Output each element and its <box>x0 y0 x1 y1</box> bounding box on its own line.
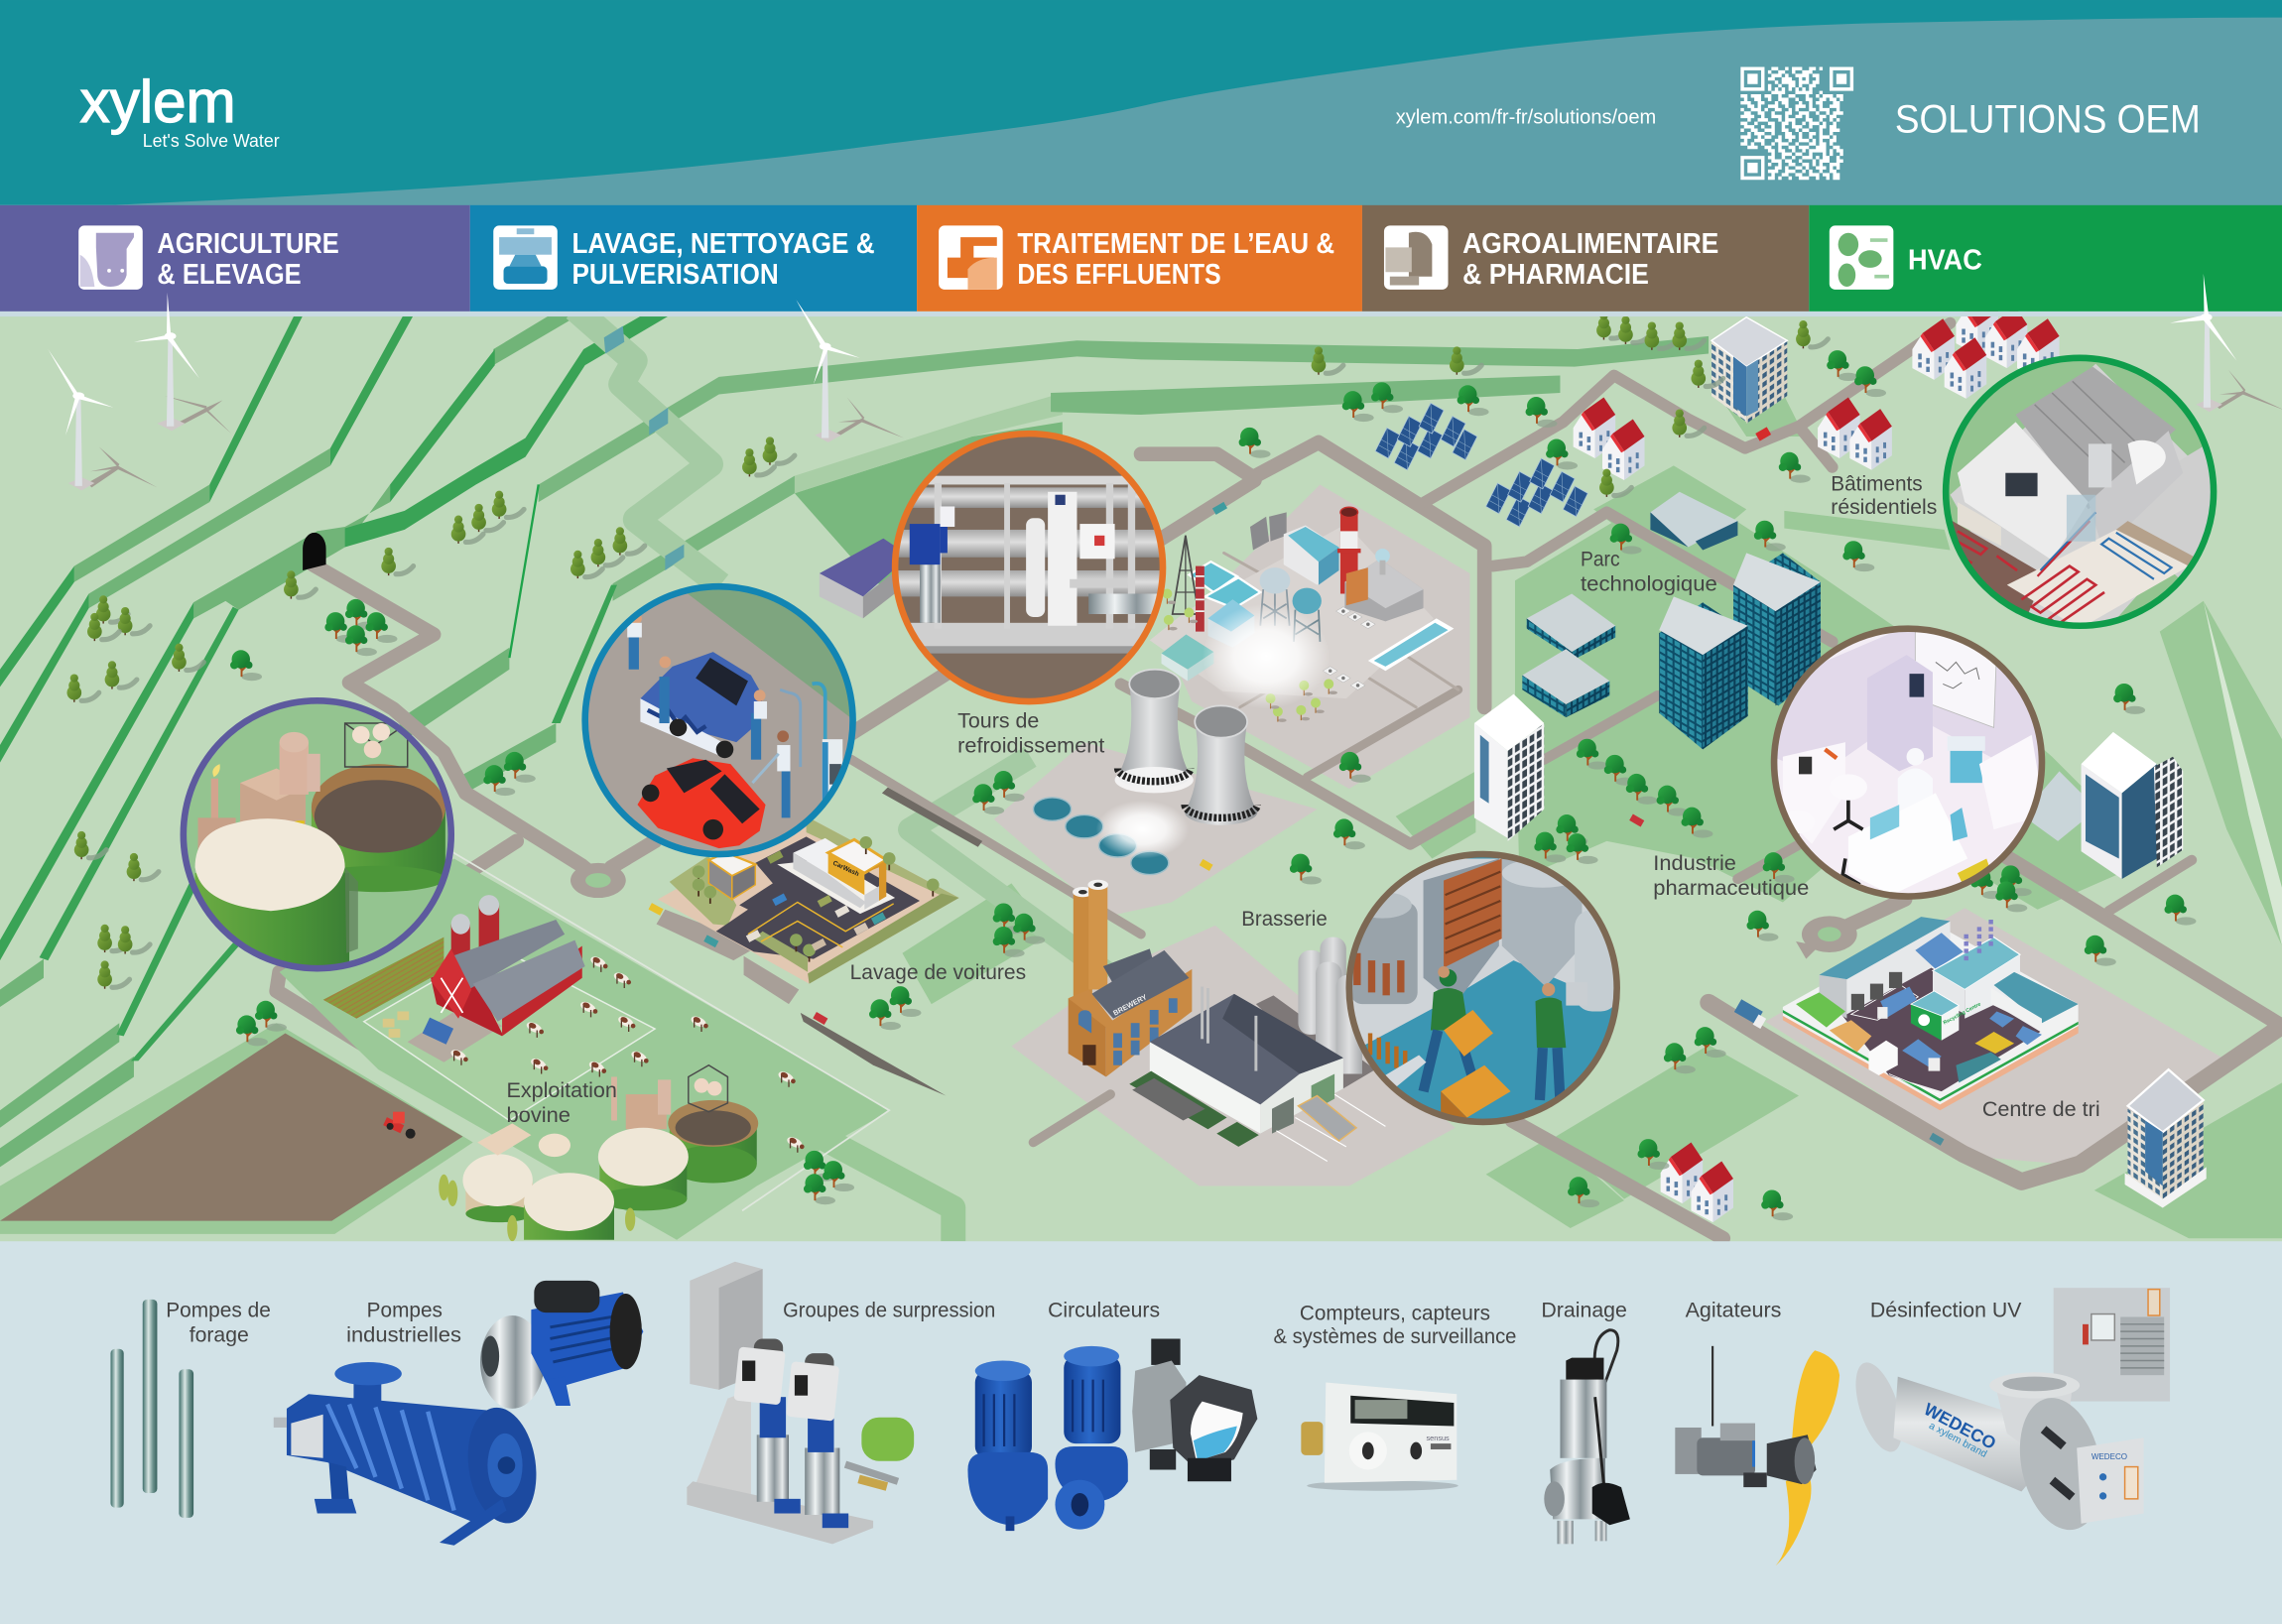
tunnel <box>303 533 326 570</box>
map labels: Centre de tri <box>1982 1097 2100 1121</box>
wave <box>109 18 2282 205</box>
farm plot with fence, crop field, barn and silos <box>280 851 891 1240</box>
product: booster sets: Groupes de surpression <box>783 1298 995 1321</box>
beige tower top <box>1712 317 1787 424</box>
product: meters and sensors <box>1273 1301 1516 1491</box>
battery building <box>820 539 910 618</box>
product: mixers: Agitateurs <box>1686 1298 1781 1321</box>
cows <box>449 954 805 1153</box>
car wash building block: CarWash <box>831 860 860 878</box>
category: food and pharma: & PHARMACIE <box>1462 259 1649 291</box>
product: meters and sensors: & systèmes de surveillance <box>1273 1324 1516 1348</box>
product: borehole pumps: Pompes de <box>166 1298 271 1321</box>
car wash building block <box>649 816 959 1004</box>
recycling centre: Recycling Centre <box>1943 1001 1982 1026</box>
category: washing: PULVERISATION <box>571 259 779 291</box>
category: water treatment: TRAITEMENT DE L’EAU & <box>1017 228 1334 260</box>
trees <box>66 312 2196 1220</box>
map labels: Industrie <box>1653 851 1736 875</box>
category: food and pharma <box>1384 225 1718 291</box>
product: drainage pump: Drainage <box>1541 1298 1627 1321</box>
power plant <box>1150 507 1454 722</box>
category: hvac <box>1830 225 1982 290</box>
category: hvac: HVAC <box>1908 244 1982 276</box>
panel: biogas detail circle <box>184 700 451 975</box>
product: UV disinfection: a xylem brand <box>1927 1421 1988 1460</box>
product: meters and sensors: sensus <box>1427 1434 1450 1442</box>
cooling towers and settling ponds <box>1033 670 1257 875</box>
product: industrial pumps <box>274 1281 643 1546</box>
map labels: Brasserie <box>1241 907 1328 931</box>
map labels: Tours de <box>957 708 1039 732</box>
map labels: résidentiels <box>1831 495 1937 519</box>
plazas <box>994 484 2225 1186</box>
wind turbines <box>48 274 2282 490</box>
category: washing: LAVAGE, NETTOYAGE & <box>571 228 875 260</box>
category: agriculture <box>78 225 339 291</box>
logo: Let's Solve Water <box>143 130 280 151</box>
map labels: Lavage de voitures <box>850 960 1026 984</box>
panel: car wash detail circle <box>585 582 873 854</box>
category: agriculture: & ELEVAGE <box>157 259 302 291</box>
map labels <box>506 471 2100 1127</box>
logo: xylem <box>80 68 236 135</box>
houses <box>1574 294 2060 1222</box>
product: borehole pumps: forage <box>190 1322 249 1346</box>
roads <box>277 323 2282 1238</box>
category: water treatment <box>939 225 1334 291</box>
product: UV disinfection: WEDECO <box>2092 1452 2127 1461</box>
lower-right beige tower <box>2125 1069 2207 1207</box>
product: drainage pump <box>1541 1298 1630 1544</box>
logo <box>80 68 280 151</box>
category bar <box>0 205 2282 316</box>
category: washing <box>493 225 875 291</box>
map labels: Parc <box>1581 548 1620 571</box>
brown field and tractor <box>0 1033 462 1221</box>
recycling centre <box>1734 917 2079 1110</box>
roundabouts <box>570 788 1857 1096</box>
panel: brewery detail circle <box>1346 854 1618 1122</box>
category: food and pharma: AGROALIMENTAIRE <box>1462 228 1718 260</box>
qr code <box>1740 66 1853 180</box>
product: meters and sensors: Compteurs, capteurs <box>1300 1301 1490 1324</box>
product: UV disinfection: Désinfection UV <box>1870 1298 2022 1321</box>
biogas plant bottom <box>439 1065 758 1241</box>
product: mixers <box>1675 1298 1839 1565</box>
map labels: Exploitation <box>506 1078 617 1102</box>
brewery buildings <box>1069 880 1385 1162</box>
product: UV disinfection <box>1846 1288 2170 1538</box>
product: circulators: Circulateurs <box>1048 1298 1160 1321</box>
product: UV disinfection: WEDECO <box>1921 1399 1999 1453</box>
product: circulators <box>967 1298 1257 1531</box>
map labels: technologique <box>1581 572 1717 596</box>
product: industrial pumps: Pompes <box>367 1298 443 1321</box>
brewery buildings: BREWERY <box>1111 992 1148 1018</box>
white office tower <box>1474 694 1544 841</box>
technology park <box>1522 492 1821 749</box>
main title: SOLUTIONS OEM <box>1895 97 2201 141</box>
product: borehole pumps <box>110 1298 271 1518</box>
header band <box>0 0 2282 205</box>
panel: HVAC detail circle <box>1946 358 2226 629</box>
map labels: refroidissement <box>957 733 1104 757</box>
category: agriculture: AGRICULTURE <box>157 228 339 260</box>
panel: laboratory detail circle <box>1773 626 2045 902</box>
website url: xylem.com/fr-fr/solutions/oem <box>1396 106 1656 129</box>
category: water treatment: DES EFFLUENTS <box>1017 259 1221 291</box>
solar panel arrays <box>1375 403 1587 527</box>
product: booster sets <box>687 1262 995 1544</box>
map labels: bovine <box>506 1103 570 1127</box>
map labels: pharmaceutique <box>1653 876 1809 900</box>
map background <box>0 312 2282 1243</box>
panel: products strip <box>0 1241 2282 1624</box>
map labels: Bâtiments <box>1831 471 1923 495</box>
right-side office towers <box>2032 732 2183 879</box>
product: industrial pumps: industrielles <box>346 1322 461 1346</box>
panel: water treatment detail circle <box>888 434 1179 701</box>
terraces: hillside bands and irrigation lines <box>0 309 2282 1241</box>
small vehicles <box>813 427 1944 1146</box>
